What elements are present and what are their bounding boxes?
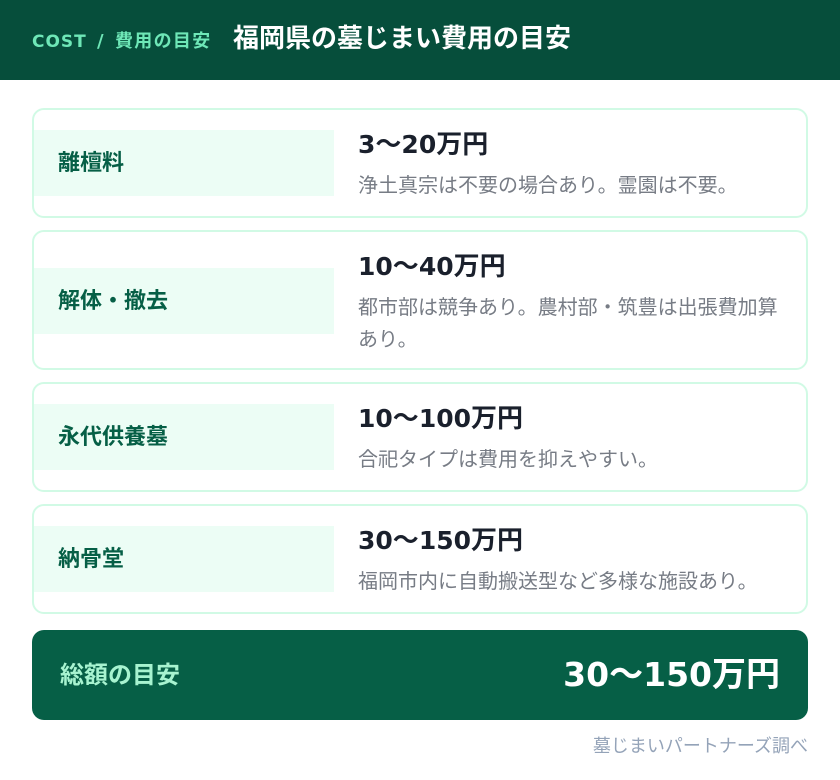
kicker: COST xyxy=(32,32,87,52)
kicker: / xyxy=(97,31,104,52)
price: 解体・撤去: 10〜40万円 xyxy=(358,252,506,282)
price: 永代供養墓: 10〜100万円 xyxy=(358,404,523,434)
panel: 永代供養墓 xyxy=(32,382,808,492)
panel: 解体・撤去 xyxy=(32,230,808,370)
panel: 納骨堂 xyxy=(32,504,808,614)
label: 納骨堂: 納骨堂 xyxy=(58,547,124,572)
header band xyxy=(0,0,840,80)
total label: 総額の目安 xyxy=(60,661,180,689)
source note: 墓じまいパートナーズ調べ xyxy=(593,736,808,757)
price: 納骨堂: 30〜150万円 xyxy=(358,526,523,556)
label: 離檀料: 離檀料 xyxy=(58,151,124,176)
title: 福岡県の墓じまい費用の目安 xyxy=(233,24,571,54)
note: 永代供養墓: 合祀タイプは費用を抑えやすい。 xyxy=(358,447,658,471)
label: 解体・撤去 xyxy=(34,268,334,334)
kicker: 費用の目安 xyxy=(115,31,212,52)
label: 解体・撤去: 解体・撤去 xyxy=(58,289,168,314)
label: 永代供養墓: 永代供養墓 xyxy=(58,425,168,450)
panel: 離檀料 xyxy=(32,108,808,218)
price: 離檀料: 3〜20万円 xyxy=(358,130,488,160)
note: 離檀料: 浄土真宗は不要の場合あり。霊園は不要。 xyxy=(358,173,738,197)
total value: 30〜150万円 xyxy=(563,655,780,695)
note: 納骨堂: 福岡市内に自動搬送型など多様な施設あり。 xyxy=(358,569,758,593)
label: 納骨堂 xyxy=(34,526,334,592)
note: 解体・撤去: 都市部は競争あり。農村部・筑豊は出張費加算あり。 xyxy=(358,295,778,351)
kicker xyxy=(32,31,212,52)
label: 離檀料 xyxy=(34,130,334,196)
total bar xyxy=(32,630,808,720)
label: 永代供養墓 xyxy=(34,404,334,470)
